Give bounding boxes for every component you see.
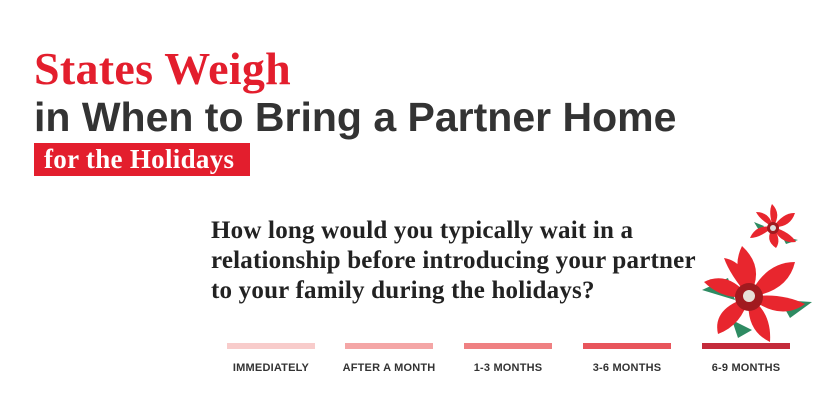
question text: to your family during the holidays?	[211, 277, 595, 304]
legend	[227, 343, 790, 374]
legend labels: IMMEDIATELY	[233, 362, 309, 374]
legend: 6-9 months	[702, 343, 790, 349]
legend: AFTER A MONTH	[343, 362, 435, 374]
legend: 1-3 months	[464, 343, 552, 349]
legend: 3-6 MONTHS	[593, 362, 661, 374]
question text: How long would you typically wait in a	[211, 217, 633, 244]
icon: small poinsettia	[750, 204, 798, 248]
icon: poinsettias	[702, 204, 812, 342]
question text: relationship before introducing your partner	[211, 247, 696, 274]
legend: after a month	[345, 343, 433, 349]
title: for the Holidays banner: for the Holidays	[44, 144, 234, 174]
legend: immediately	[227, 343, 315, 349]
title: States Weigh: States Weigh	[34, 43, 291, 94]
legend: 3-6 months	[583, 343, 671, 349]
title: main line: in When to Bring a Partner Home	[34, 94, 676, 140]
question text	[211, 217, 696, 304]
icon: large poinsettia	[702, 246, 812, 342]
legend: 6-9 MONTHS	[712, 362, 780, 374]
legend: 1-3 MONTHS	[474, 362, 542, 374]
